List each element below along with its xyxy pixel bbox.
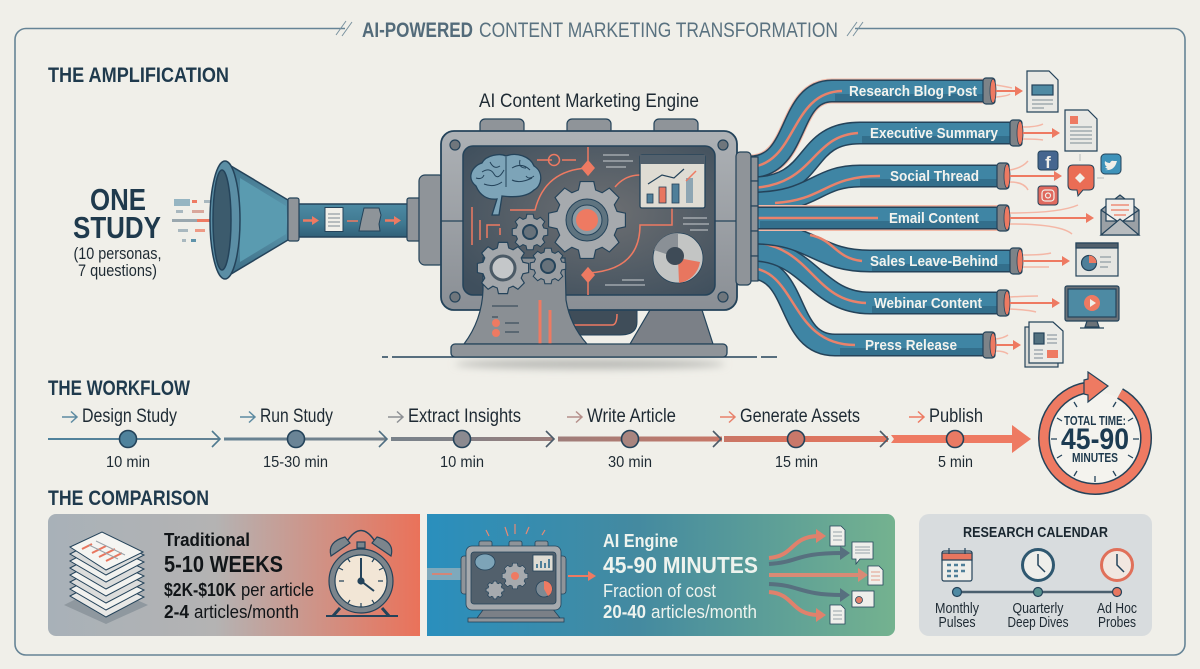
workflow timeline [48,406,1031,471]
traditional text: Traditional [164,530,250,550]
panel: ai engine [427,514,895,636]
front stand [464,258,587,344]
bolts [450,140,728,302]
total time clock [1044,372,1146,489]
fan-out icons [830,526,883,624]
output arrow [568,571,596,581]
engine base [451,344,727,357]
screen [463,146,715,295]
ai engine text: 45-90 MINUTES [603,552,758,578]
icon: alarm clock [326,530,398,616]
title [336,19,863,42]
pipe labels: Webinar Content [874,295,982,312]
output pipes [750,91,1012,345]
pipe labels: Executive Summary [870,125,999,142]
timeline nodes [120,430,964,448]
calendar labels: Ad Hoc [1097,600,1137,617]
step labels: Generate Assets [740,406,860,427]
pipe: webinar content [750,242,999,303]
icon: facebook: f [1045,153,1051,172]
traditional text: 2-4 [164,602,189,622]
pie chart [653,233,703,283]
heading: one study: 7 questions) [78,261,157,280]
calendar labels: Deep Dives [1008,614,1068,631]
icon: quarterly clock [1022,550,1054,580]
icon: social group [1038,151,1121,205]
pipe labels: Email Content [889,210,979,227]
step durations: 10 min [106,454,150,471]
step durations: 10 min [440,454,484,471]
chart window [640,155,705,208]
pipe labels [849,83,999,354]
title: AI-POWERED [362,19,473,42]
pipe: social thread [750,176,999,203]
step labels: Design Study [82,406,177,427]
icon: chat bubble [1068,165,1094,196]
heading: engine: AI Content Marketing Engine [479,91,699,112]
ai engine text: articles/month [651,602,757,622]
icon: webinar monitor [1065,286,1119,328]
traditional text: per article [241,580,314,600]
calendar labels: Probes [1098,614,1136,631]
large gear [549,182,625,258]
step labels: Write Article [587,406,676,427]
traditional text: $2K-$10K [164,580,236,600]
step arrows [62,412,924,422]
small gear [512,214,548,250]
pipe: press release [750,268,985,345]
icon: blog document [1027,71,1058,112]
icon: twitter [1101,154,1121,174]
icon: executive summary document [1065,110,1097,151]
panel: research calendar [919,514,1152,636]
pipe labels: Social Thread [890,168,979,185]
step labels [82,406,983,427]
calendar heading: RESEARCH CALENDAR [963,524,1108,541]
pipe: research blog post [750,91,985,167]
step durations: 15-30 min [263,454,328,471]
input pipe [288,198,421,241]
heading: one study: (10 personas, [74,244,162,263]
traditional text [164,530,314,622]
step labels: Publish [929,406,983,427]
engine [382,119,777,369]
top knobs [480,119,698,135]
icon: instagram [1038,186,1058,205]
heading: the workflow: THE WORKFLOW [48,377,190,400]
traditional text: articles/month [194,602,299,622]
icon: paper stack [64,532,148,624]
step durations: 15 min [775,454,818,471]
heading: the amplification: THE AMPLIFICATION [48,64,229,87]
ai engine text [603,531,758,622]
engine body [441,131,737,310]
right flange [736,152,758,285]
circuit traces [472,147,672,295]
icon: ad hoc clock [1102,550,1132,580]
pipe labels: Sales Leave-Behind [870,253,998,270]
step durations [106,454,973,471]
icon: sales deck window [1076,243,1118,276]
traditional text: 5-10 WEEKS [164,551,283,577]
step labels: Run Study [260,406,333,427]
icon: envelope [1101,195,1139,235]
step durations: 5 min [938,454,973,471]
heading: one study [73,182,162,280]
ai engine text: AI Engine [603,531,678,551]
lower gears [477,242,566,294]
left flange [419,175,445,265]
incoming data streaks [172,199,223,242]
heading: one study: ONE [90,182,146,217]
timeline bar [48,425,1031,453]
fan-out arrows [769,529,868,622]
total time clock: TOTAL TIME: [1064,414,1126,428]
step labels: Extract Insights [408,406,521,427]
icon: mini engine [427,541,566,622]
heading: one study: STUDY [73,210,161,245]
ai engine text: 20-40 [603,602,646,622]
brain [471,154,541,215]
calendar timeline [952,588,1122,596]
calendar labels [935,600,1137,631]
icon: calendar [942,548,972,581]
pipe labels: Press Release [865,337,957,354]
pipe end collars [983,78,1023,358]
screen detail lines [603,155,709,285]
title: CONTENT MARKETING TRANSFORMATION [479,19,838,42]
panel: traditional [48,514,420,636]
output arrows [996,85,1094,354]
timeline chevrons [212,431,888,447]
calendar labels: Monthly [935,600,979,617]
step durations: 30 min [608,454,652,471]
ai engine text: Fraction of cost [603,581,716,601]
funnel [210,161,288,279]
pipe: executive summary [750,133,1012,188]
spark marks [486,524,545,536]
total time clock: 45-90 [1061,423,1129,456]
icon: press release [1025,322,1063,367]
engine shadow and ground line [382,357,777,369]
pipe: email content [750,205,999,231]
pipe labels: Research Blog Post [849,83,977,100]
heading: the comparison: THE COMPARISON [48,487,209,510]
rear stand [630,310,713,344]
calendar labels: Quarterly [1012,600,1064,617]
calendar labels: Pulses [938,614,976,631]
pipe shading [760,94,1012,355]
pipe: sales leave-behind [750,233,1012,261]
total time clock: MINUTES [1072,451,1118,465]
